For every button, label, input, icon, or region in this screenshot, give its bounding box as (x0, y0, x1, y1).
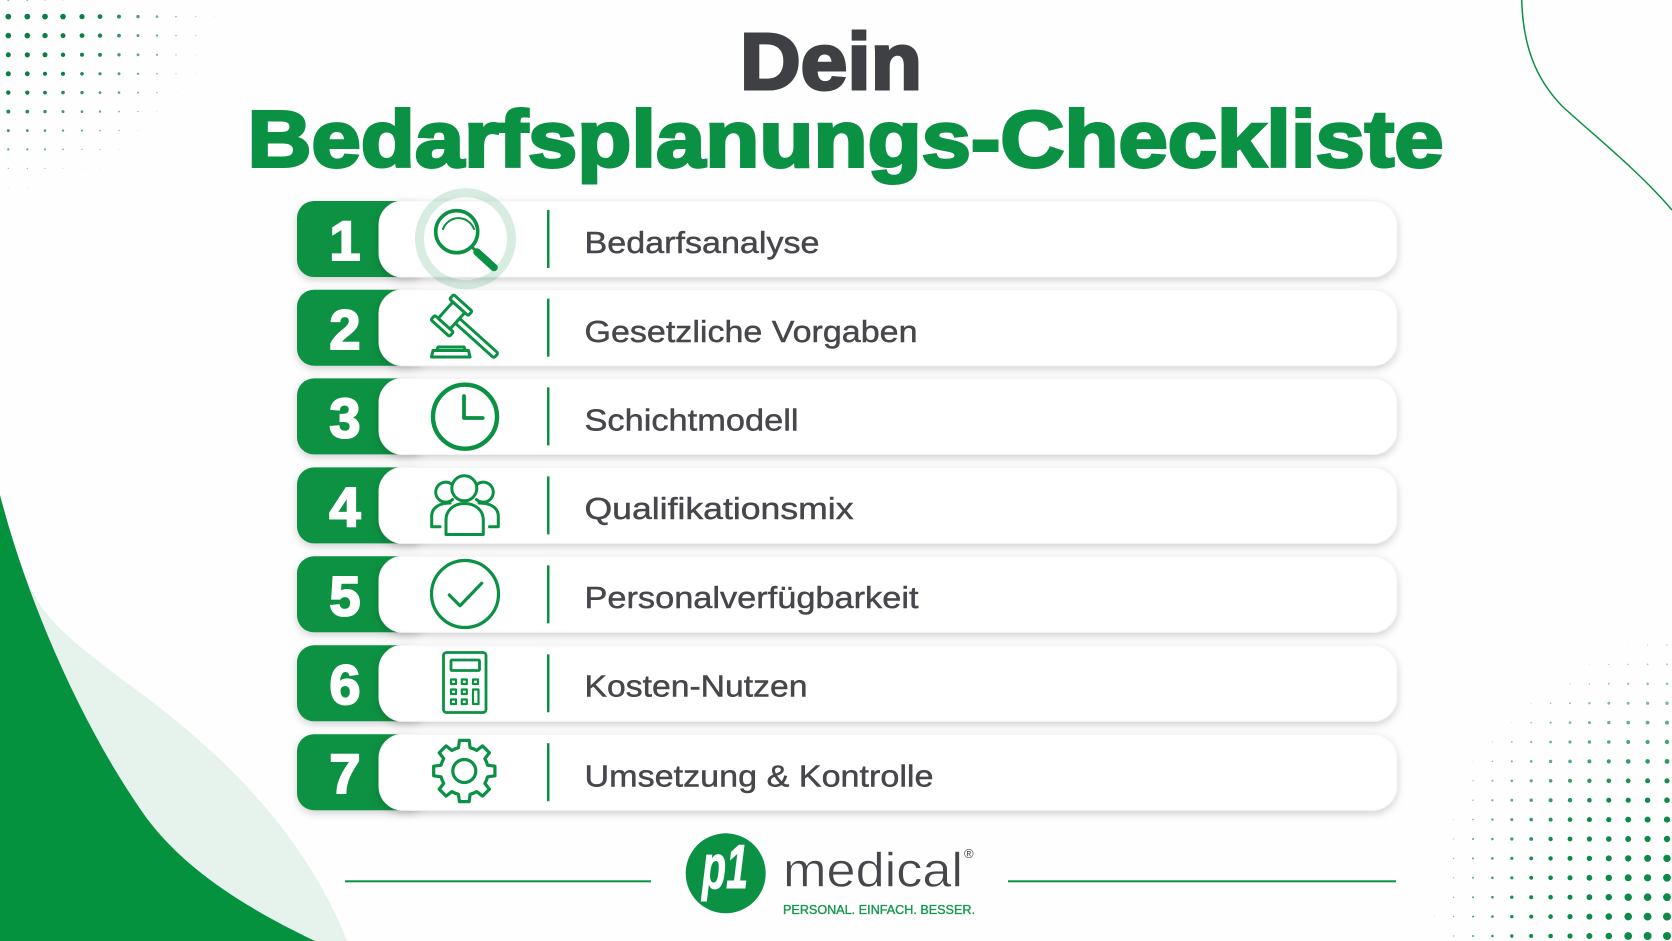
logo wordmark: medical (783, 844, 963, 898)
divider and label: Qualifikationsmix (584, 491, 854, 526)
footer rule right (1008, 880, 1396, 882)
icon: clock (433, 385, 497, 449)
number badge 3 (297, 378, 427, 454)
number badge 4 (297, 467, 427, 543)
divider and label: Kosten-Nutzen (584, 668, 808, 704)
number badge 6 (297, 645, 427, 721)
icon: gear (434, 740, 495, 802)
number 3: 3 (329, 386, 361, 450)
icon: check circle (432, 560, 498, 628)
title (248, 17, 1444, 184)
title line: Bedarfsplanungs-Checkliste: Bedarfsplanungs-Checkliste (248, 94, 1444, 184)
number 2: 2 (329, 298, 361, 361)
decoration: dot pattern top left (0, 0, 240, 200)
row card 7 (379, 734, 1397, 810)
row 2: Gesetzliche Vorgaben (297, 290, 1397, 366)
number 1: 1 (329, 209, 361, 272)
decoration: solid green swoosh bottom left (0, 495, 315, 941)
number badge 5 (297, 556, 427, 632)
row 1: Bedarfsanalyse (297, 201, 1397, 277)
registered mark: ® (964, 846, 974, 861)
number 4: 4 (329, 476, 361, 538)
logo mark: p1 (701, 833, 748, 902)
row card 3 (379, 378, 1397, 454)
divider and label: Bedarfsanalyse (584, 225, 820, 260)
number badge 1 (297, 201, 427, 277)
icon: calculator (444, 652, 486, 712)
logo mark (686, 833, 766, 913)
icon: gavel (431, 295, 507, 368)
icon: people group (432, 476, 498, 534)
divider and label: Personalverfügbarkeit (584, 580, 919, 615)
row card 4 (379, 467, 1397, 543)
divider and label: Schichtmodell (584, 402, 798, 438)
decoration: dot pattern bottom right (1400, 620, 1672, 941)
divider and label: Gesetzliche Vorgaben (584, 314, 918, 349)
number 7: 7 (329, 742, 361, 805)
row 5: Personalverfügbarkeit (297, 556, 1397, 632)
footer rule left (345, 880, 651, 882)
row 7: Umsetzung & Kontrolle (297, 734, 1397, 810)
icon: magnifying glass with halo (420, 193, 512, 285)
row card 1 (379, 201, 1397, 277)
divider and label: Umsetzung & Kontrolle (584, 758, 934, 794)
number 5: 5 (329, 564, 361, 628)
row card 2 (379, 290, 1397, 366)
row card 6 (379, 645, 1397, 721)
row 6: Kosten-Nutzen (297, 645, 1397, 721)
decoration: thin curve top right (1522, 0, 1672, 210)
title line: Dein: Dein (740, 17, 922, 106)
row 4: Qualifikationsmix (297, 467, 1397, 543)
logo tagline: PERSONAL. EINFACH. BESSER. (783, 903, 975, 917)
row 3: Schichtmodell (297, 378, 1397, 454)
number badge 7 (297, 734, 427, 810)
row card 5 (379, 556, 1397, 632)
number badge 2 (297, 290, 427, 366)
decoration: light green swoosh bottom left (0, 580, 347, 941)
logo: p1 medical (686, 833, 975, 917)
number 6: 6 (329, 653, 361, 716)
